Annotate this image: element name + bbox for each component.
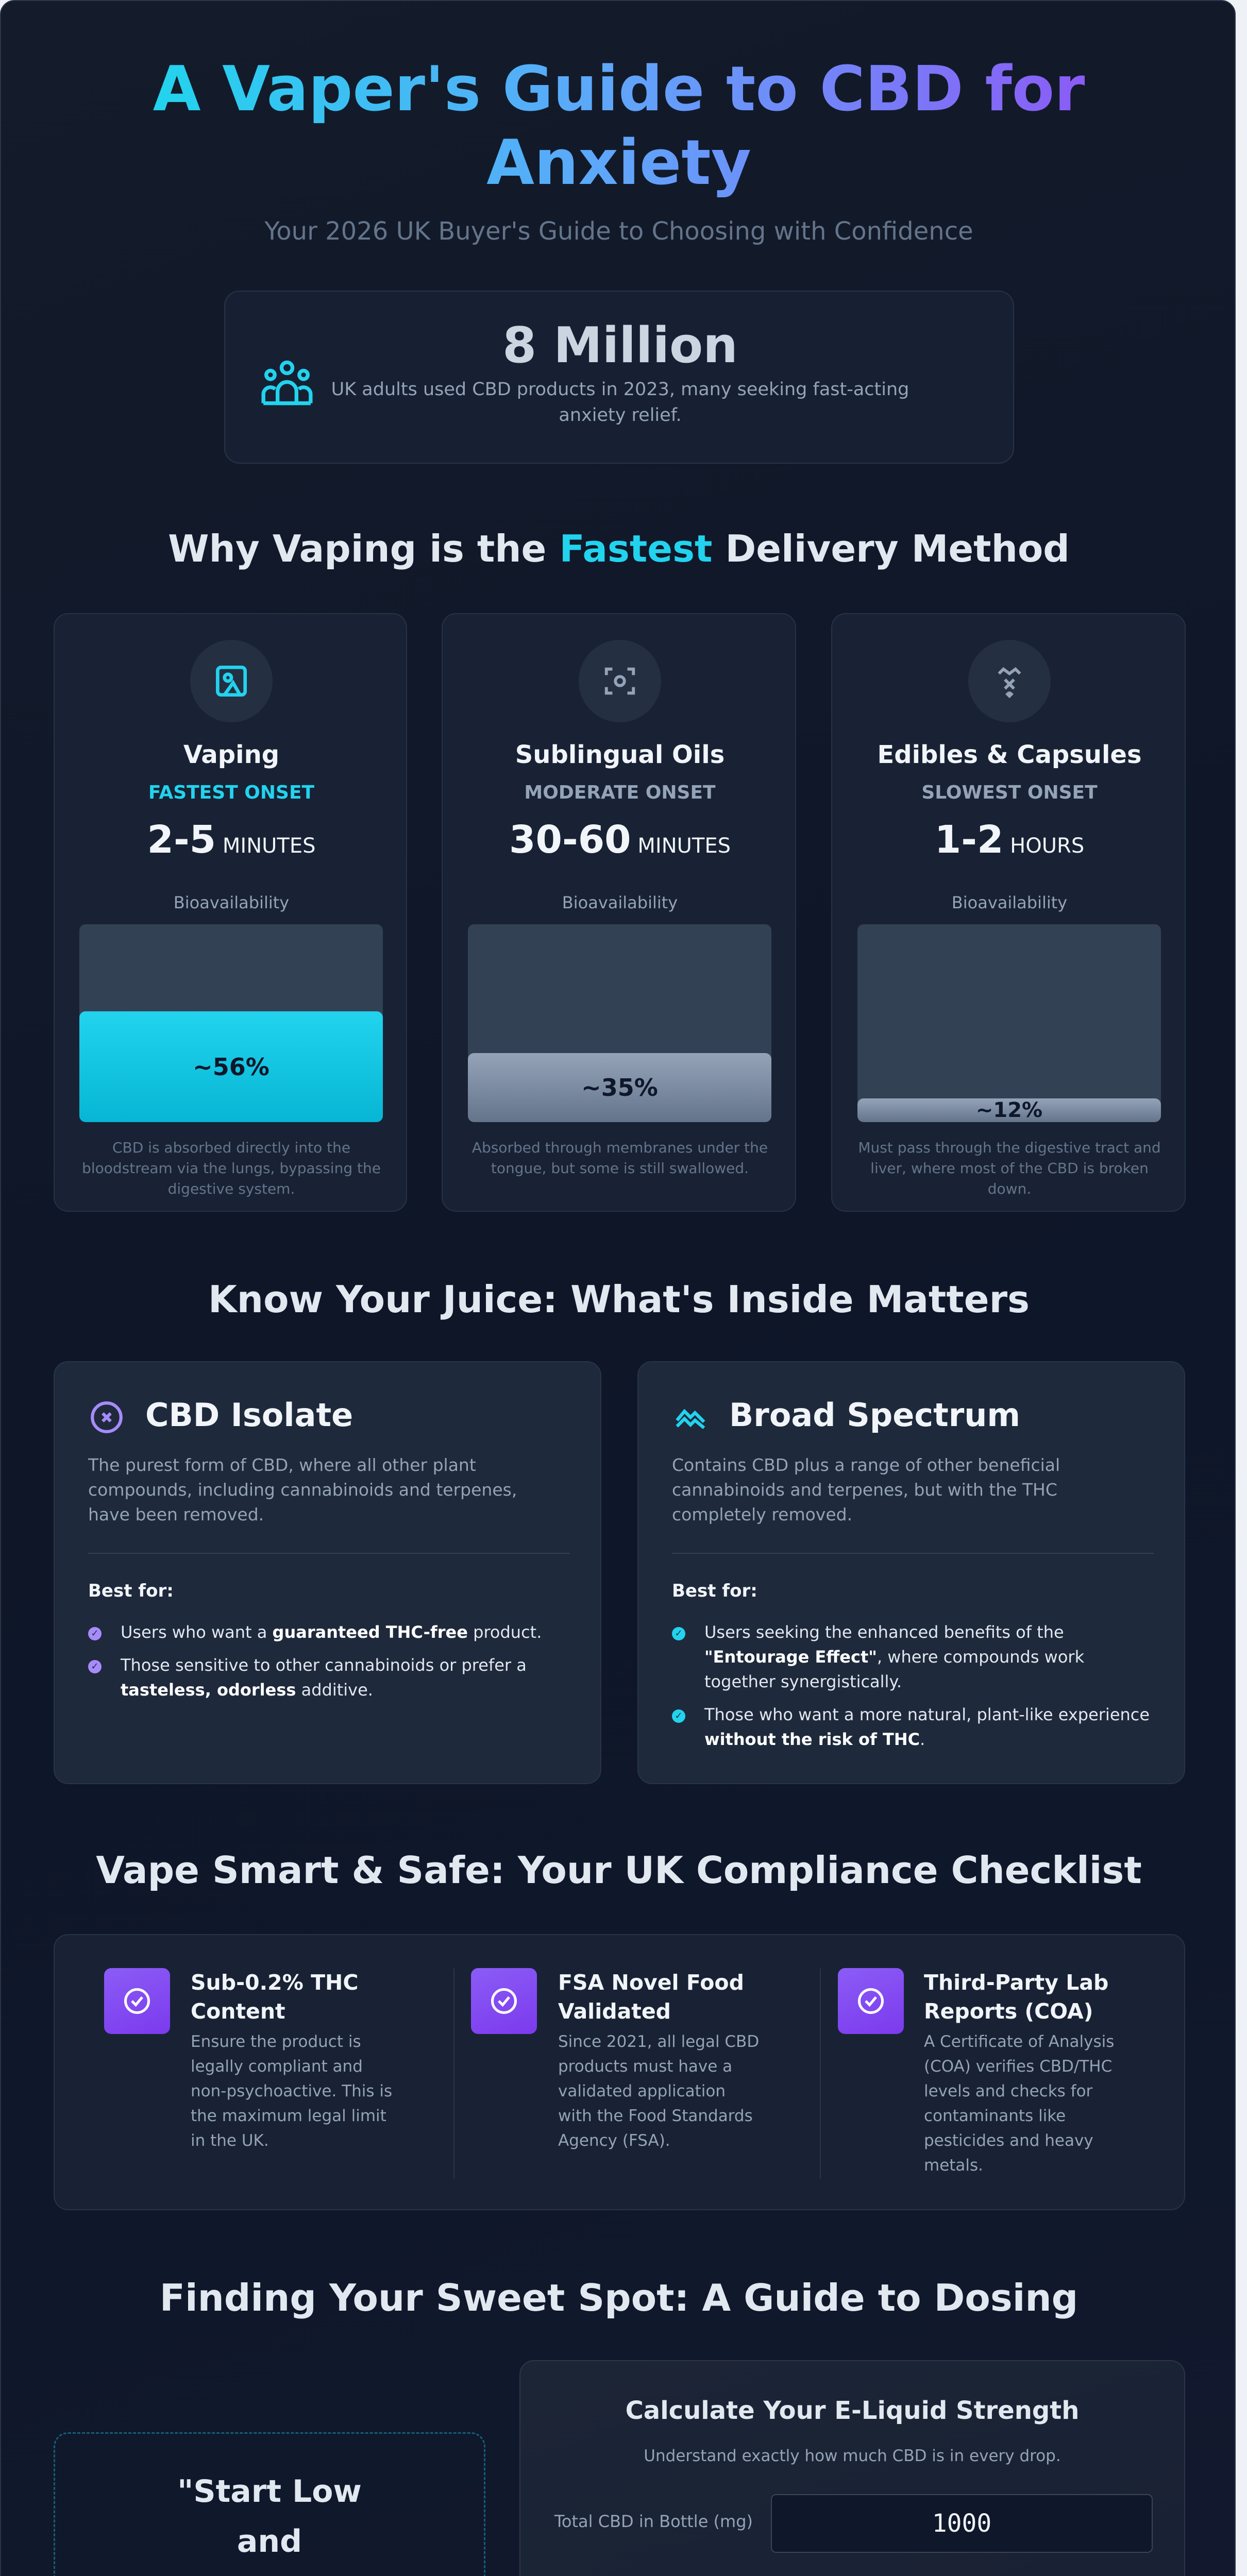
bullet list: Those who want a more natural, plant-like experience without the risk of THC. [704, 1705, 1150, 1749]
item: COA [838, 1968, 1114, 2175]
subtitle: Your 2026 UK Buyer's Guide to Choosing with Confidence [264, 217, 973, 246]
bullet list: ✓ [675, 1628, 683, 1639]
item: THC: Ensure the product is legally compliant and non-psychoactive. This is the maximum legal limit in the UK. [191, 2032, 392, 2150]
panel: vaping: Bioavailability [174, 893, 289, 912]
item: FSA [471, 1968, 759, 2150]
panel: vaping: Vaping [183, 740, 279, 769]
stat box [224, 291, 1014, 464]
bullet list: Users who want a guaranteed THC-free product. [121, 1622, 542, 1642]
panel: calculator: Understand exactly how much CBD is in every drop. [644, 2447, 1061, 2465]
heading: know your juice: Know Your Juice: What's Inside Matters [208, 1278, 1030, 1321]
panel: edibles: Must pass through the digestive tract and liver, where most of the CBD is broken down. [858, 1139, 1161, 1197]
bullet list: ✓ [91, 1661, 99, 1672]
bullet list: Those sensitive to other cannabinoids or prefer a tasteless, odorless additive. [121, 1655, 527, 1700]
heading: compliance: Vape Smart & Safe: Your UK Compliance Checklist [96, 1849, 1142, 1892]
panel: edibles: Edibles & Capsules [877, 740, 1142, 769]
panel: calculator [519, 2360, 1185, 2576]
callout: start low go slow: and [237, 2523, 302, 2560]
icon: isolate [91, 1401, 123, 1433]
item: COA: A Certificate of Analysis (COA) verifies CBD/THC levels and checks for contaminants like pesticides and heavy metals. [924, 2032, 1114, 2175]
title: Anxiety [486, 127, 751, 199]
title [153, 54, 1085, 199]
panel: sublingual: 30-60 MINUTES [509, 818, 731, 862]
panel: broad spectrum: Best for: [672, 1581, 757, 1601]
icon: check [838, 1968, 904, 2034]
item: COA: Third-Party Lab Reports (COA) [924, 1970, 1108, 2024]
input: total CBD: Total CBD in Bottle (mg) [554, 2512, 753, 2531]
icon: check [104, 1968, 170, 2034]
icon: tongue [579, 640, 661, 722]
panel: edibles: SLOWEST ONSET [921, 782, 1098, 803]
heading: why vaping: Why Vaping is the Fastest Delivery Method [168, 527, 1070, 570]
panel: calculator: 1000 [932, 2509, 991, 2538]
title: A Vaper's Guide to CBD for [153, 54, 1085, 125]
panel: sublingual: Sublingual Oils [515, 740, 724, 769]
panel: edibles [831, 613, 1186, 1212]
item: FSA: FSA Novel Food Validated [558, 1970, 744, 2024]
stat text: UK adults used CBD products in 2023, many seeking fast-acting anxiety relief. [331, 379, 909, 426]
bullet list [672, 1622, 1150, 1749]
icon: check [471, 1968, 537, 2034]
panel: sublingual: Bioavailability [562, 893, 678, 912]
panel: CBD isolate: The purest form of CBD, where all other plant compounds, including cannabinoids and terpenes, have been removed. [88, 1455, 517, 1524]
panel: broad spectrum [637, 1361, 1185, 1784]
panel: vaping [54, 613, 407, 1212]
stat number: 8 Million [502, 317, 738, 374]
icon: spectrum [676, 1409, 705, 1429]
bullet list: Users seeking the enhanced benefits of the "Entourage Effect", where compounds work together synergistically. [704, 1622, 1084, 1691]
heading: dosing: Finding Your Sweet Spot: A Guide to Dosing [160, 2276, 1078, 2319]
callout: start low go slow: "Start Low [177, 2473, 362, 2510]
panel: CBD isolate: CBD Isolate [145, 1396, 353, 1434]
panel: calculator: Calculate Your E-Liquid Strength [626, 2396, 1079, 2425]
panel: vaping: 2-5 MINUTES [147, 818, 316, 862]
item: THC: Sub-0.2% THC Content [191, 1970, 358, 2024]
icon: people [262, 361, 312, 405]
panel: sublingual: Absorbed through membranes under the tongue, but some is still swallowed. [472, 1139, 768, 1177]
icon: vape [190, 640, 273, 722]
bar: 56% [79, 924, 383, 1122]
bullet list: ✓ [675, 1710, 683, 1721]
panel: compliance checklist [54, 1934, 1185, 2210]
bar: 12% [857, 924, 1161, 1122]
panel: edibles: Bioavailability [952, 893, 1067, 912]
bar: 35% [468, 924, 771, 1122]
panel: vaping: CBD is absorbed directly into the bloodstream via the lungs, bypassing the digestive system. [82, 1139, 381, 1197]
bar: 12%: ~12% [976, 1098, 1042, 1122]
panel: CBD isolate [54, 1361, 601, 1784]
item: FSA: Since 2021, all legal CBD products must have a validated application with the Food Standards Agency (FSA). [558, 2032, 759, 2150]
panel: vaping: FASTEST ONSET [148, 782, 314, 803]
item: THC [104, 1968, 392, 2150]
panel: CBD isolate: Best for: [88, 1581, 174, 1601]
callout: start low go slow [54, 2432, 485, 2576]
bar: 35%: ~35% [581, 1074, 658, 1101]
panel: sublingual [442, 613, 796, 1212]
panel: broad spectrum: Broad Spectrum [729, 1396, 1020, 1434]
panel: broad spectrum: Contains CBD plus a range of other beneficial cannabinoids and terpenes, but with the THC completely removed. [672, 1455, 1060, 1524]
bullet list [88, 1622, 542, 1700]
bullet list: ✓ [91, 1628, 99, 1639]
panel: edibles: 1-2 HOURS [935, 818, 1084, 862]
bar: 56%: ~56% [193, 1053, 269, 1081]
panel: sublingual: MODERATE ONSET [524, 782, 716, 803]
icon: digestion [968, 640, 1051, 722]
